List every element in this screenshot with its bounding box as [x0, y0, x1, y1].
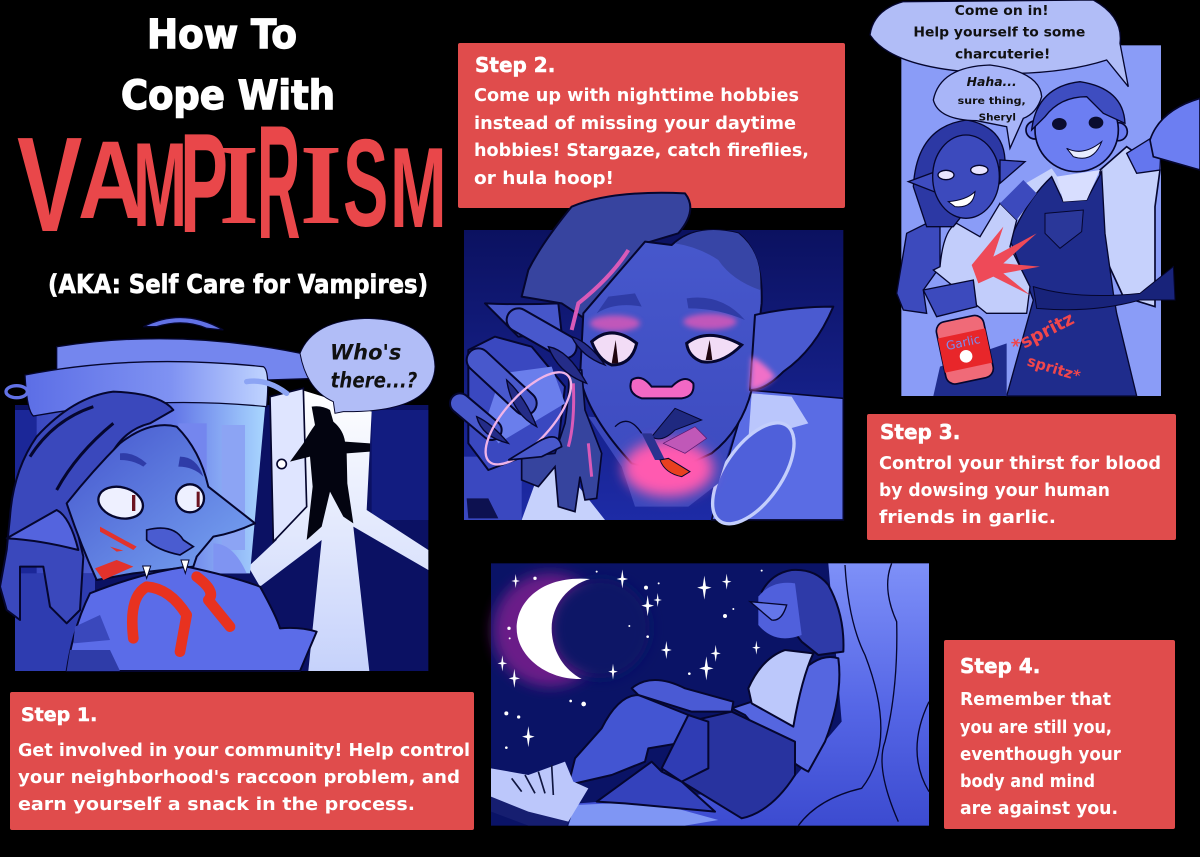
- text box: step 4: you are still you,: [960, 717, 1112, 738]
- speech bubble: come on in: charcuterie!: [955, 47, 1050, 62]
- lower left fill: [15, 573, 95, 671]
- speech bubble: haha: Haha...: [967, 74, 1017, 89]
- trash can: [6, 317, 322, 671]
- text box: step 1: [10, 692, 474, 830]
- vampire face: [7, 425, 255, 580]
- sitting figure: [491, 570, 843, 826]
- brush lettering: VAMPIRISM: I: [219, 123, 259, 248]
- brush lettering: VAMPIRISM: R: [257, 91, 300, 272]
- title: [17, 12, 447, 300]
- seat highlight: [568, 802, 718, 826]
- raccoon with blood: [67, 560, 317, 671]
- text box: step 3: [867, 414, 1176, 540]
- text box: step 4: body and mind: [960, 771, 1095, 792]
- text box: step 1: Step 1.: [21, 704, 97, 726]
- raccoon behind: [213, 543, 247, 573]
- brush lettering: VAMPIRISM: [17, 91, 447, 272]
- text box: step 2: [458, 43, 845, 208]
- speech bubble: haha: Sheryl: [979, 113, 1016, 124]
- text box: step 4: Remember that: [960, 689, 1111, 710]
- text box: step 4: Step 4.: [960, 654, 1040, 678]
- brush lettering: VAMPIRISM: V: [17, 109, 82, 260]
- vampire hair: [0, 392, 173, 623]
- text box: step 1: your neighborhood's raccoon problem, and: [18, 767, 460, 788]
- title: (AKA: Self Care for Vampires): [48, 270, 428, 300]
- text box: step 2: hobbies! Stargaze, catch fireflies,: [474, 140, 809, 161]
- hula hoop on shoulder: [697, 409, 810, 537]
- garlic bottle: [935, 314, 995, 386]
- text box: step 2: Come up with nighttime hobbies: [474, 85, 799, 106]
- moon: [493, 573, 650, 687]
- chin and neck glow: [623, 440, 713, 497]
- spritz text: spritz*: [1025, 353, 1083, 385]
- shirt: [464, 390, 843, 520]
- hair top: [522, 193, 690, 320]
- hand with nails: [460, 320, 605, 477]
- title: Cope With: [121, 73, 335, 119]
- brush lettering: VAMPIRISM: A: [78, 119, 143, 242]
- vampire: [897, 120, 1037, 396]
- brush lettering: VAMPIRISM: I: [300, 122, 342, 249]
- speech bubble: who's there: Who's: [330, 340, 401, 364]
- speech bubble: come on in: Help yourself to some: [913, 26, 1086, 41]
- panel: step 4 illustration: [491, 563, 929, 826]
- brush lettering: VAMPIRISM: M: [133, 119, 187, 252]
- neck: [588, 417, 735, 507]
- brush lettering: VAMPIRISM: M: [390, 124, 447, 251]
- text box: step 2: Step 2.: [475, 53, 555, 77]
- garlic bottle: Garlic: [945, 332, 982, 353]
- text box: step 2: instead of missing your daytime: [474, 113, 796, 134]
- wall: [568, 563, 929, 826]
- speech bubble: who's there: [300, 318, 435, 413]
- text box: step 4: are against you.: [960, 798, 1118, 819]
- speech bubble: haha: [933, 65, 1042, 148]
- stars: [498, 569, 763, 749]
- doorway light: [248, 388, 428, 671]
- firefly: [615, 408, 707, 477]
- text box: step 1: Get involved in your community! Help control: [18, 740, 470, 761]
- brush lettering: VAMPIRISM: P: [180, 103, 228, 262]
- text box: step 2: or hula hoop!: [474, 168, 614, 189]
- signature: [467, 498, 498, 518]
- text box: step 4: eventhough your: [960, 744, 1121, 765]
- brush lettering: VAMPIRISM: S: [343, 114, 388, 253]
- spritz text: [1008, 308, 1083, 385]
- panel: step 3 illustration: [870, 0, 1200, 396]
- speech bubble: come on in: [870, 0, 1128, 87]
- text box: step 3: Step 3.: [880, 420, 960, 444]
- side dreads: [522, 370, 602, 512]
- speech bubble: who's there: there...?: [331, 368, 417, 392]
- left ear: [485, 303, 562, 337]
- text box: step 3: friends in garlic.: [879, 507, 1056, 528]
- spritz text: *spritz: [1008, 308, 1078, 357]
- text box: step 1: earn yourself a snack in the process.: [18, 794, 415, 815]
- speech bubble: come on in: Come on in!: [955, 4, 1049, 19]
- speech bubble: haha: sure thing,: [958, 96, 1026, 107]
- text box: step 3: by dowsing your human: [879, 480, 1110, 501]
- panel: step 2 illustration: [460, 193, 843, 537]
- spray burst: [972, 227, 1040, 295]
- head: [580, 230, 833, 473]
- title: How To: [147, 12, 297, 58]
- text box: step 3: Control your thirst for blood: [879, 453, 1161, 474]
- friend in apron: [1007, 82, 1200, 396]
- panel: step 1 illustration: [0, 317, 435, 671]
- text box: step 4: [944, 640, 1175, 829]
